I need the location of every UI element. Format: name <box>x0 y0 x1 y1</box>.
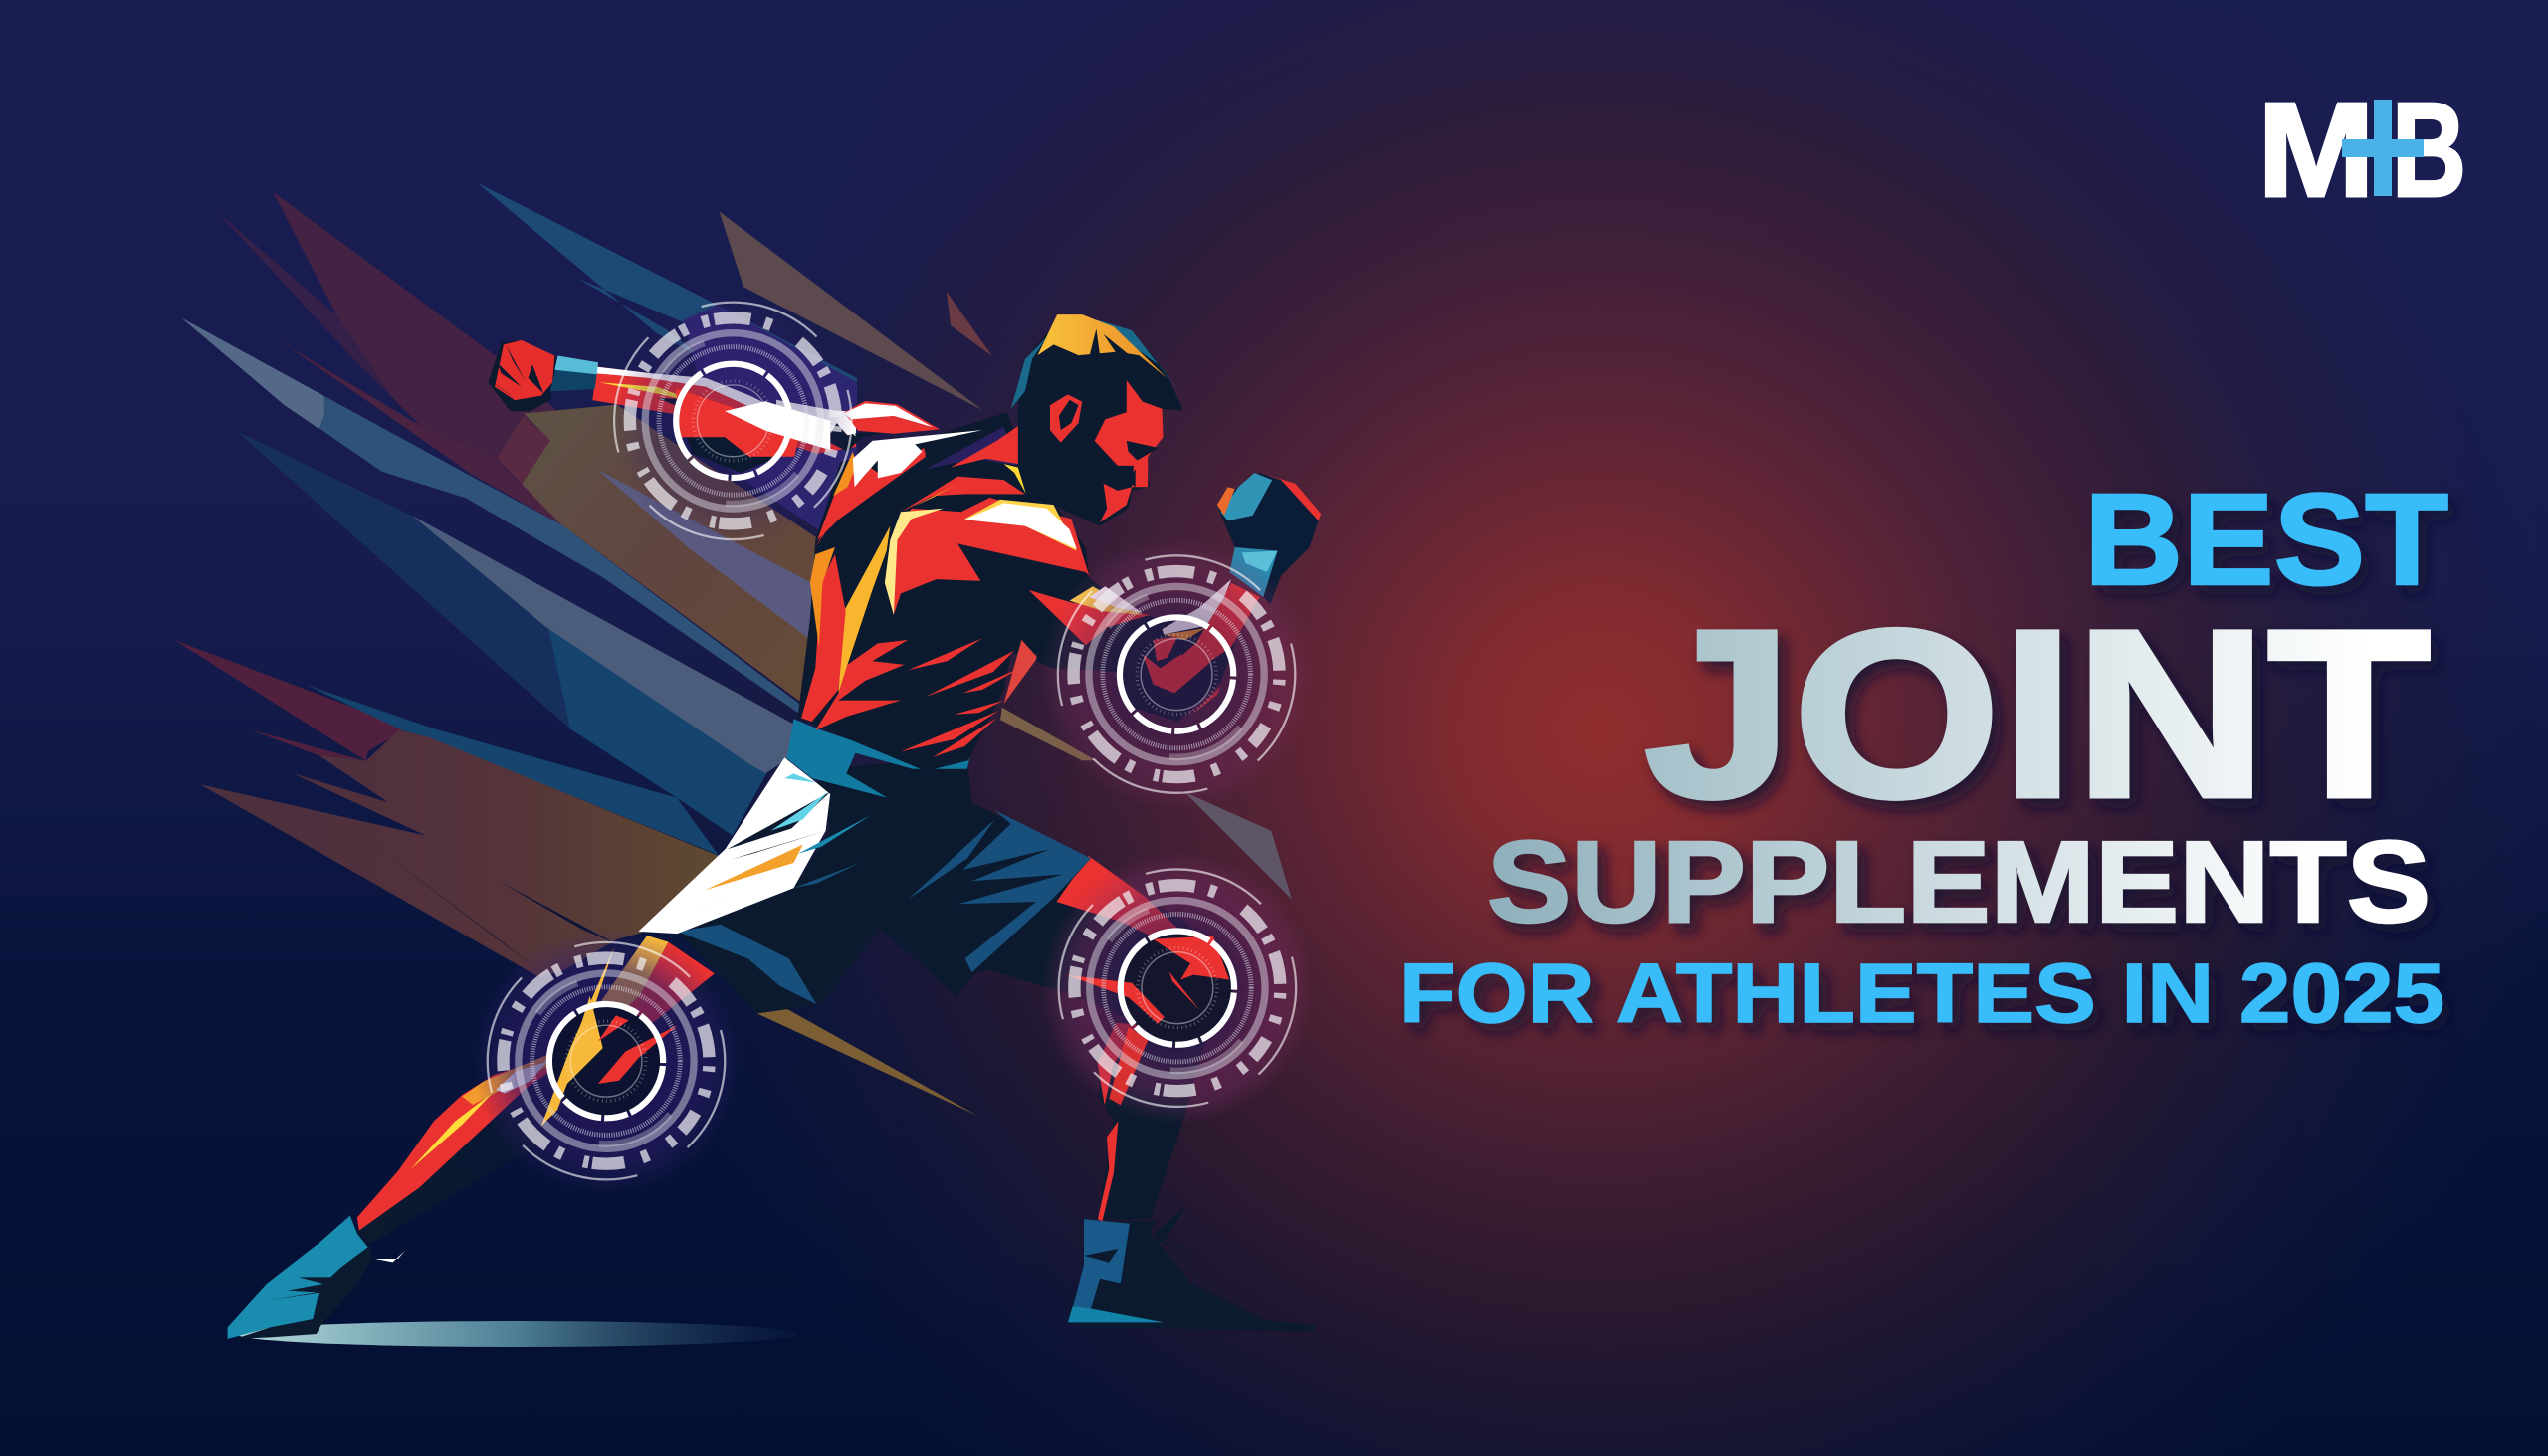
joint target: front elbow <box>1031 529 1322 820</box>
title: FOR ATHLETES IN 2025: FOR ATHLETES IN 2025 <box>1399 946 2444 1040</box>
grey shard right <box>1184 792 1292 900</box>
front leg <box>972 856 1232 1221</box>
head <box>1011 314 1183 526</box>
logo: M+B <box>2257 75 2466 225</box>
back leg <box>357 936 715 1244</box>
torso <box>797 409 1089 771</box>
title: JOINT: JOINT <box>1644 580 2431 847</box>
right gold streak behind arm <box>1000 708 1096 760</box>
waistband <box>787 719 969 798</box>
front shoe <box>1068 1205 1314 1332</box>
joint target: back knee <box>461 916 751 1206</box>
gold streak lower <box>757 1000 976 1115</box>
front arm and glove <box>1029 473 1321 722</box>
background shards <box>175 182 982 976</box>
boxer figure <box>228 314 1321 1339</box>
joint target: back arm <box>587 276 878 566</box>
small maroon shard <box>947 292 992 356</box>
left glove <box>488 340 598 411</box>
ground shadow <box>236 1321 797 1347</box>
joint targets <box>461 276 1323 1206</box>
back shoe <box>228 1216 405 1339</box>
shorts <box>638 757 1091 1013</box>
logo: M+B: M <box>2257 75 2375 225</box>
title: BEST: BEST <box>2084 466 2448 612</box>
logo: M+B: B <box>2392 75 2466 225</box>
glove right <box>1217 473 1321 604</box>
joint target: front knee <box>1032 843 1323 1134</box>
back arm <box>592 367 940 454</box>
title: SUPPLEMENTS: SUPPLEMENTS <box>1487 817 2431 946</box>
